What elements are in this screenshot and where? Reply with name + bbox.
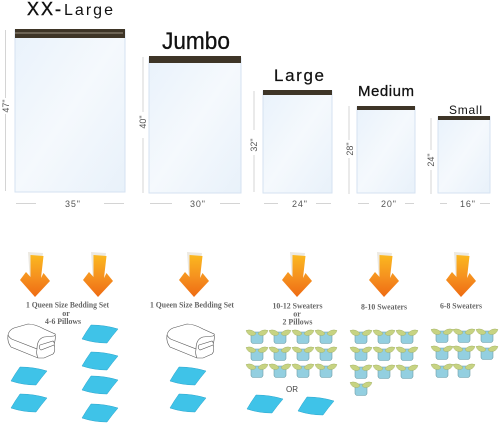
icons: Medium contents: [350, 330, 418, 396]
label: Large capacity: 10-12 Sweaters: [272, 302, 322, 310]
dimensions: XX-Large: [1, 30, 124, 209]
heading: Medium: Medium: [358, 83, 414, 100]
dimensions: Large: 32": [249, 138, 259, 152]
dimensions: XX-Large: 35": [65, 199, 80, 209]
icons: Small contents: [431, 329, 498, 378]
heading: Jumbo: Jumbo: [162, 28, 230, 55]
dimensions: Small: 24": [426, 153, 436, 167]
bag: Large: [263, 66, 332, 193]
label: XX-Large capacity: 4-6 Pillows: [45, 317, 81, 326]
dimensions: Large: 24": [292, 199, 307, 209]
heading: Small: Small: [449, 103, 482, 117]
bag: XX-Large: [15, 0, 125, 192]
label: Jumbo capacity: 1 Queen Size Bedding Set: [150, 300, 234, 310]
bag: Small: [438, 103, 490, 193]
label: Large capacity: or: [293, 310, 301, 318]
heading: XX-Large: Large: [64, 2, 113, 19]
bag: Jumbo: [149, 28, 241, 193]
label: XX-Large capacity: 1 Queen Size Bedding Set: [26, 300, 109, 310]
label: Small capacity: 6-8 Sweaters: [440, 302, 482, 310]
dimensions: XX-Large: 47": [1, 99, 11, 113]
label: Large capacity: 2 Pillows: [282, 318, 312, 326]
heading: XX-Large: [27, 0, 113, 19]
dimensions: Medium: [345, 106, 414, 209]
icons: XX-Large contents: [8, 324, 118, 422]
dimensions: Small: 16": [460, 199, 475, 209]
dimensions: Jumbo: 30": [190, 199, 205, 209]
arrow 3: [179, 252, 209, 297]
bag: Medium: [357, 83, 415, 193]
dimensions: Jumbo: [138, 57, 240, 209]
label: XX-Large capacity: [26, 300, 109, 326]
heading: Large: Large: [274, 66, 324, 85]
arrow 2: [83, 252, 113, 297]
arrow 1: [20, 252, 50, 297]
label: Medium capacity: 8-10 Sweaters: [361, 302, 407, 312]
text: OR: OR: [286, 385, 298, 394]
dimensions: Jumbo: 40": [138, 115, 148, 129]
label: Large capacity: [272, 302, 322, 326]
label: XX-Large capacity: or: [62, 309, 70, 318]
icons: Jumbo contents: [167, 324, 214, 412]
arrow 4: [282, 252, 312, 297]
arrow 5: [369, 252, 399, 297]
icons: Large contents: [246, 330, 337, 415]
dimensions: Medium: 20": [381, 199, 396, 209]
dimensions: Small: [426, 118, 490, 209]
dimensions: Large: [249, 91, 331, 209]
dimensions: Medium: 28": [345, 142, 355, 156]
arrow 6: [446, 252, 476, 297]
